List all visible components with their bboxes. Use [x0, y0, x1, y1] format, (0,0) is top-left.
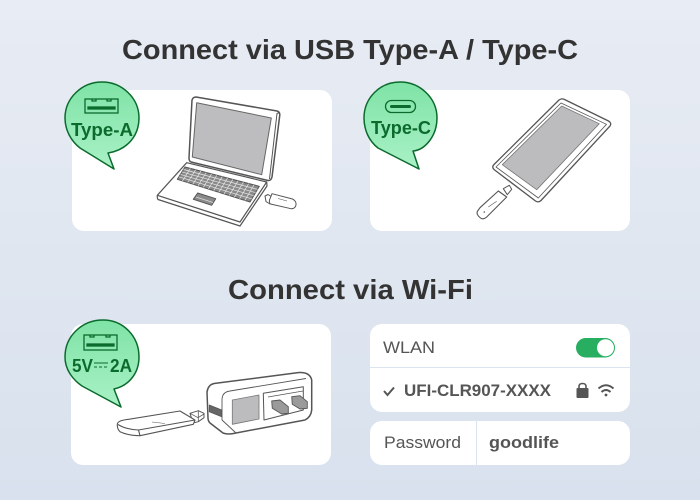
text: Password label: Password — [384, 433, 461, 452]
text: 5V: 5V — [72, 356, 93, 376]
icon: lock — [576, 384, 588, 398]
callout: Type-A — [65, 82, 139, 169]
illustration: laptop with dongle — [157, 97, 296, 226]
panel: laptop USB Type-A — [72, 90, 332, 231]
icon: USB-C port — [386, 100, 416, 112]
icon: USB-A port — [85, 99, 118, 113]
icon: USB port — [84, 335, 117, 350]
illustration: tablet with dongle — [477, 99, 611, 219]
title: Wi-Fi connection: Connect via Wi-Fi — [228, 274, 473, 305]
text: Type-A: Type-A — [71, 120, 133, 140]
icon: check — [384, 388, 394, 395]
text: network name: UFI-CLR907-XXXX — [404, 381, 552, 400]
usb dongle — [265, 194, 272, 204]
illustration: dongle in adapter — [117, 372, 312, 436]
text: password value: goodlife — [489, 433, 559, 452]
icon: wifi — [598, 385, 614, 396]
text: WLAN: WLAN — [383, 338, 435, 357]
panel: WLAN settings — [370, 324, 630, 412]
text: Type-C: Type-C — [371, 118, 431, 138]
title: USB connection: Connect via USB Type-A / Type-C — [122, 34, 578, 65]
toggle switch — [576, 338, 615, 358]
panel: password — [370, 421, 630, 465]
panel: power adapter — [71, 324, 331, 465]
type-c dongle — [503, 185, 512, 195]
callout: Type-C — [364, 82, 437, 169]
text: 2A: 2A — [110, 356, 132, 376]
panel: tablet USB Type-C — [370, 90, 630, 231]
symbol: direct current — [94, 363, 108, 367]
callout: 5V 2A — [65, 320, 139, 407]
